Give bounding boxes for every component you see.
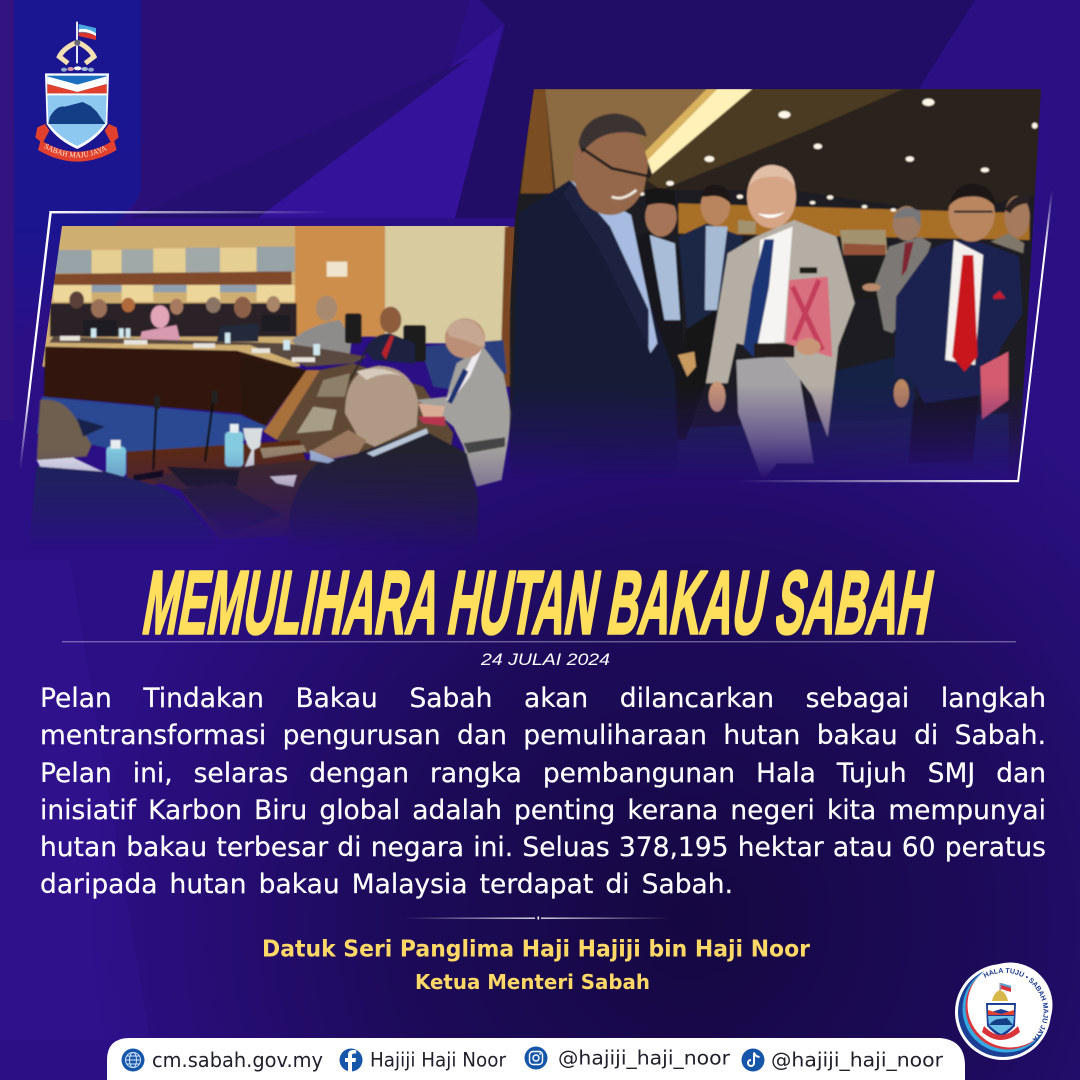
icon: website globe xyxy=(122,1048,144,1072)
man in navy suit, front left xyxy=(31,398,212,536)
body paragraph: hutan bakau terbesar di negara ini. Seluas 378,195 hektar atau 60 peratus xyxy=(40,832,1046,863)
photo: cabinet meeting room xyxy=(31,226,515,542)
photo frame: left xyxy=(19,211,330,470)
back row attendees xyxy=(50,291,426,363)
logo: Sabah state crest xyxy=(35,22,119,162)
man at far right xyxy=(991,195,1030,253)
bottles and microphones xyxy=(60,328,367,482)
body paragraph: daripada hutan bakau Malaysia terdapat di Sabah. xyxy=(40,869,733,900)
speaker role: Ketua Menteri Sabah xyxy=(415,970,650,994)
body paragraph xyxy=(40,683,1046,900)
facebook name: Hajiji Haji Noor xyxy=(370,1048,507,1072)
man in dark suit, back view xyxy=(289,364,479,542)
photo frame: right xyxy=(738,190,1053,482)
social media bar xyxy=(107,1038,965,1080)
crest ribbon: SABAH MAJU JAYA xyxy=(44,144,108,158)
body paragraph: Pelan Tindakan Bakau Sabah akan dilancarkan sebagai langkah xyxy=(40,683,1046,714)
speaker name: Datuk Seri Panglima Haji Hajiji bin Haji Noor xyxy=(262,936,811,962)
body paragraph: Pelan ini, selaras dengan rangka pembangunan Hala Tujuh SMJ dan xyxy=(40,758,1046,789)
man in navy suit at left xyxy=(510,113,678,480)
title rule xyxy=(62,641,1016,642)
instagram handle: @hajiji_haji_noor xyxy=(558,1046,731,1070)
man in grey suit at head of table xyxy=(417,318,512,487)
icon: instagram xyxy=(524,1046,548,1070)
ceiling downlights xyxy=(639,99,1038,212)
website address: cm.sabah.gov.my xyxy=(152,1048,323,1072)
icon: tiktok xyxy=(742,1048,764,1072)
photo: Chief Minister with delegation xyxy=(510,87,1047,480)
body paragraph: mentransformasi pengurusan dan pemuliharaan hutan bakau di Sabah. xyxy=(40,720,1046,751)
man behind in grey suit xyxy=(862,206,931,333)
icon: facebook xyxy=(340,1048,362,1072)
tiktok handle: @hajiji_haji_noor xyxy=(771,1048,944,1072)
man in songkok xyxy=(639,188,682,365)
badge: Hala Tuju Sabah Maju Jaya xyxy=(955,962,1052,1060)
man with red tie xyxy=(894,183,1022,463)
body paragraph: inisiatif Karbon Biru global adalah penting kerana negeri kita mempunyai xyxy=(40,795,1046,826)
man with blue shirt behind xyxy=(675,185,743,440)
Chief Minister in grey suit xyxy=(706,165,855,480)
badge: Hala Tuju Sabah Maju Jaya: HALA TUJU • SABAH MAJU JAYA xyxy=(983,968,1048,1040)
date: 24 JULAI 2024 xyxy=(480,651,610,669)
conference table xyxy=(37,347,453,540)
